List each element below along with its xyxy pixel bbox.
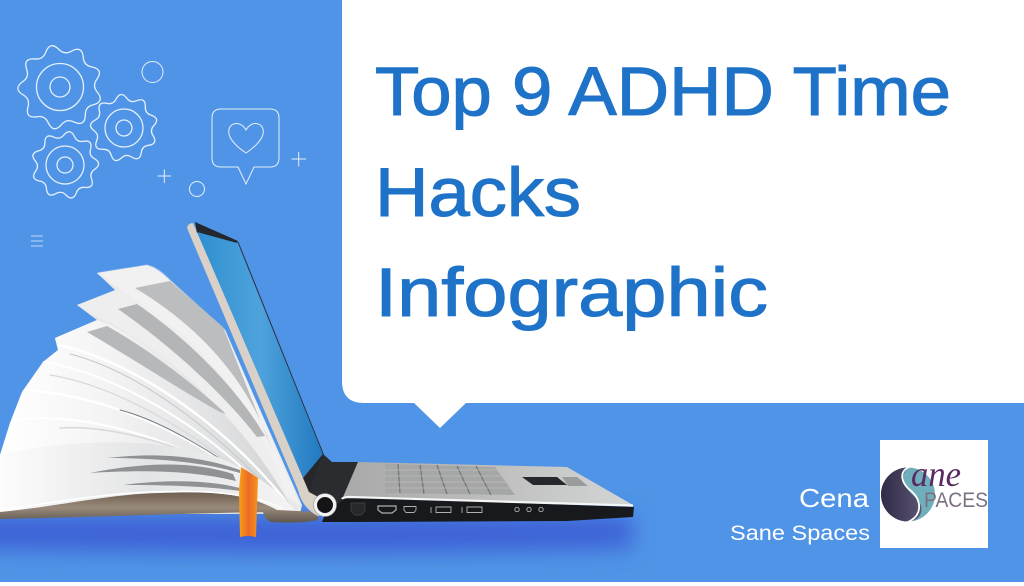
second flap page xyxy=(77,290,290,505)
front edge highlight xyxy=(342,497,633,506)
laptop lid xyxy=(187,223,325,516)
laptop lid top bezel xyxy=(195,222,238,244)
icon: large gear xyxy=(11,37,109,135)
port: hdmi xyxy=(378,506,396,513)
logo S swirl xyxy=(890,466,919,523)
page lines xyxy=(15,345,285,500)
page fan xyxy=(0,320,300,514)
second flap grey area xyxy=(118,304,265,437)
port: ethernet xyxy=(351,503,365,515)
title: Top 9 ADHD Time xyxy=(375,53,951,130)
laptop hinge block xyxy=(309,454,358,506)
port: usb 1 xyxy=(431,507,451,513)
front page edge xyxy=(0,491,282,510)
port: usb 2 xyxy=(462,507,482,513)
port: mini display xyxy=(404,506,416,512)
title: Hacks xyxy=(375,154,581,231)
title: Infographic xyxy=(375,254,768,331)
page block base xyxy=(0,265,302,514)
laptop xyxy=(187,222,634,522)
screen edge xyxy=(238,242,324,456)
icon: lower gear xyxy=(28,127,103,201)
third flap grey area xyxy=(87,326,226,414)
line icons xyxy=(11,37,306,246)
touchpad xyxy=(522,477,567,485)
logo dark half xyxy=(881,468,921,522)
icon: large circle xyxy=(142,62,163,82)
top flap page xyxy=(97,265,300,505)
icon: menu lines xyxy=(31,236,43,246)
author organisation: Sane Spaces xyxy=(730,522,870,545)
logo teal circle xyxy=(881,468,935,522)
ports xyxy=(351,503,543,515)
keyboard deck xyxy=(343,462,633,505)
book and laptop shadow xyxy=(0,516,632,552)
icon: heart speech bubble xyxy=(212,109,279,184)
port: audio jacks xyxy=(515,507,543,512)
laptop screen xyxy=(197,232,323,478)
speech bubble panel xyxy=(342,0,1024,428)
touchpad side panel xyxy=(562,477,588,486)
page shading xyxy=(90,455,240,491)
icon: plus right xyxy=(292,152,306,166)
lower screen bezel xyxy=(303,454,328,492)
logo script word: ane xyxy=(911,454,961,494)
front pages xyxy=(0,442,296,512)
icon: right gear xyxy=(88,92,160,163)
laptop side body xyxy=(322,490,634,522)
title xyxy=(375,53,951,331)
author name: Cena xyxy=(799,483,870,513)
open book xyxy=(0,265,318,537)
icon: plus left xyxy=(158,170,171,183)
icon: small circle xyxy=(190,182,204,196)
logo word: PACES xyxy=(924,489,988,512)
book cover xyxy=(0,492,318,523)
logo xyxy=(880,440,988,548)
bookmark xyxy=(239,467,258,537)
top flap grey area xyxy=(135,281,272,450)
hinge circle xyxy=(314,494,336,516)
keyboard xyxy=(385,464,515,495)
